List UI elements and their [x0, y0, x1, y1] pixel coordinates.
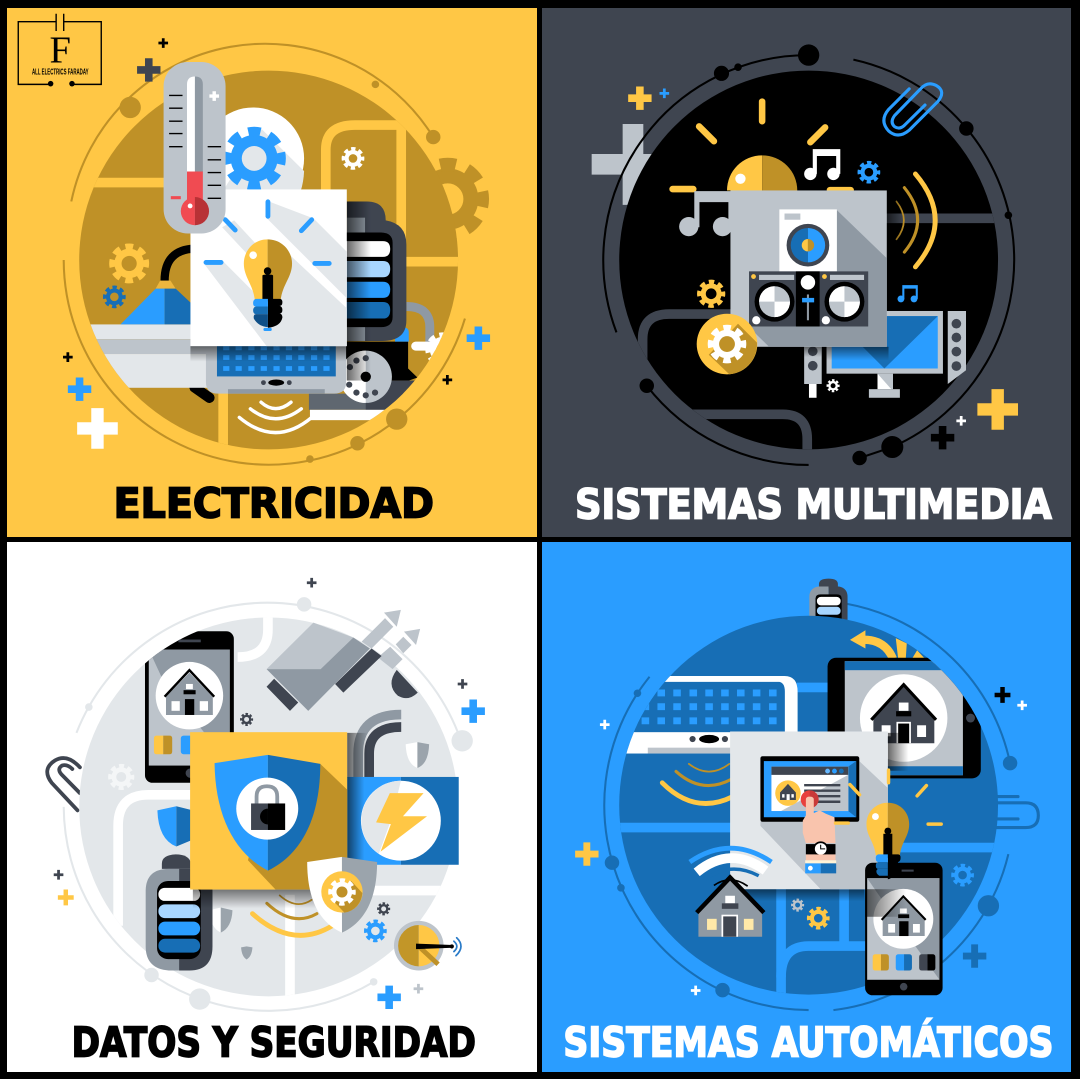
icon: white gear [343, 149, 363, 168]
panel: electricidad [7, 8, 537, 537]
icon: big grey plus [592, 124, 652, 205]
icon: light bulb [244, 239, 292, 331]
icon: house with wifi [690, 848, 771, 937]
main circle [79, 617, 458, 996]
outer ring with nodes [64, 597, 473, 1011]
icon: light bulb [866, 803, 909, 879]
icon: right speaker [948, 311, 966, 384]
logo: all electrics faraday: F [50, 30, 71, 72]
icon: keyboard [619, 676, 798, 754]
icon: blue shield [157, 806, 193, 847]
rays [206, 202, 329, 263]
panel artwork: datos [47, 578, 485, 1067]
icon: white music note [804, 149, 840, 180]
panel: sistemas automaticos [542, 542, 1071, 1072]
card: touch screen [730, 731, 888, 889]
icon: shield with gear [307, 857, 377, 933]
speaker [779, 209, 837, 271]
icon: dark blue gear [105, 287, 124, 306]
panel: datos y seguridad [7, 542, 537, 1072]
card: shield [190, 732, 347, 890]
icon: grey music note [679, 191, 733, 236]
card: light bulb [190, 189, 347, 346]
icon: gear disc [697, 314, 757, 374]
house [165, 670, 214, 715]
icon: lamp [121, 249, 195, 324]
panel artwork: multimedia [575, 44, 1052, 528]
plus signs [54, 578, 485, 1009]
icon: left speaker [804, 346, 822, 398]
icon: small dark gear [241, 714, 252, 725]
icon: white disc with blue gear [202, 107, 304, 209]
icon: blue gear [859, 163, 878, 182]
heading: electricidad: ELECTRICIDAD [114, 480, 434, 528]
mixer [749, 271, 868, 326]
panel artwork: electricidad [18, 14, 490, 528]
plus signs [575, 687, 1027, 995]
logo: all electrics faraday [18, 14, 101, 86]
icon: blue music note [897, 285, 918, 302]
card: dj deck [730, 190, 887, 347]
icon: laptop [190, 344, 347, 394]
circuit traces [643, 218, 1001, 455]
icon: battery [146, 854, 212, 970]
outer ring with nodes [604, 604, 1017, 1010]
main circle [619, 71, 998, 449]
icon: pale gear [110, 766, 132, 788]
icon: film reel [340, 351, 392, 403]
circle contents clipped to disc [616, 630, 1001, 998]
rays [835, 770, 941, 824]
house [882, 896, 926, 936]
icon: camera shape [267, 610, 420, 711]
icon: lock body with lightning [347, 777, 459, 865]
icon: monitor [827, 311, 943, 398]
icon: dark gear [378, 903, 389, 914]
icon: wifi arcs [252, 895, 332, 935]
icon: large gear at right [413, 164, 482, 234]
icon: gauge [394, 921, 461, 970]
circle contents clipped to disc [76, 125, 461, 455]
icon: paperclip lines [996, 797, 1038, 828]
main circle [79, 71, 458, 449]
outer ring with nodes [64, 44, 465, 465]
main circle [619, 616, 998, 995]
icon: paperclip [884, 84, 942, 135]
icon: thermometer [164, 62, 226, 233]
icon: blue gear [366, 921, 385, 940]
panel artwork: automaticos [563, 579, 1053, 1067]
icon: wifi arcs [239, 402, 312, 433]
logo: all electrics faraday: ALL ELECTRICS FARADAY [32, 67, 89, 77]
icon: wifi arcs [662, 764, 733, 804]
hand with watch [801, 790, 836, 873]
icon: phone [145, 631, 234, 783]
icon: small shields [209, 742, 429, 959]
icon: yellow gear [112, 247, 146, 280]
heading: datos y seguridad: DATOS Y SEGURIDAD [72, 1019, 476, 1067]
icon: gears [792, 900, 803, 911]
outer ring with nodes [603, 44, 1014, 465]
icon: yellow arrows [850, 630, 925, 659]
house [871, 685, 936, 743]
icon: bulb and rays [673, 102, 851, 190]
icon: yellow gear [699, 282, 723, 306]
icon: dark paperclip [47, 758, 80, 810]
circuit traces [118, 614, 458, 1001]
panel: sistemas multimedia [542, 8, 1071, 537]
icon: small white gear [828, 380, 839, 391]
icon: sound waves [896, 174, 935, 267]
icon: padlock shackle [358, 715, 401, 779]
monitor [760, 756, 859, 822]
icon: tablet [828, 658, 981, 778]
plus signs [63, 38, 490, 449]
icon: phone [865, 863, 943, 995]
icon: small battery [809, 579, 848, 620]
icon: battery [344, 201, 406, 381]
plus signs [628, 86, 1018, 449]
circuit traces [616, 687, 1001, 998]
